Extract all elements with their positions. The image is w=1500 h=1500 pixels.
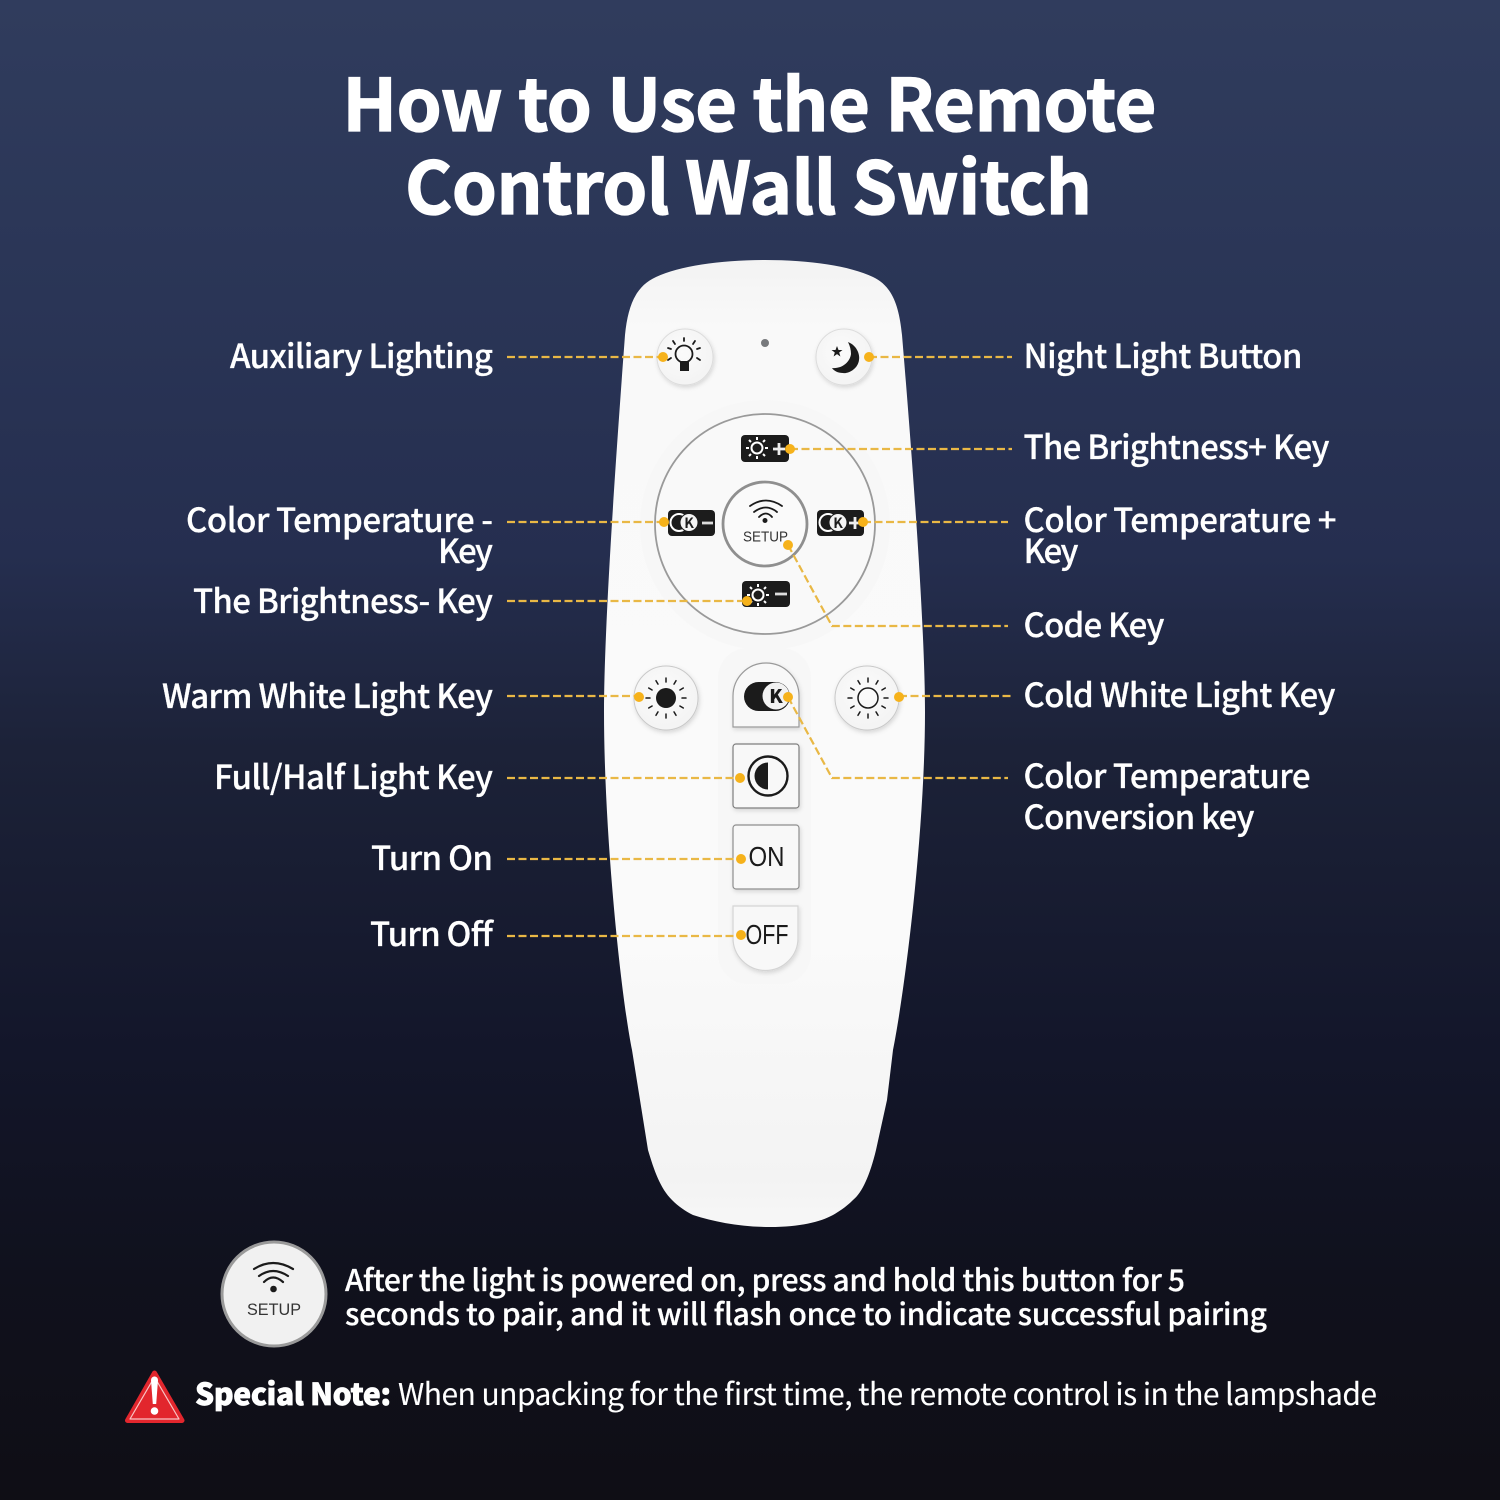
icon: full half light key [733,744,799,808]
icon: off key [733,906,798,970]
icon: setup key [743,500,788,546]
labels: right: Code Key [1024,599,1165,647]
icon: color temperature conversion key: K [769,682,783,709]
icon: auxiliary lighting button [657,329,713,385]
title: How to Use the Remote [342,47,1156,152]
icon: warning triangle [128,1373,182,1420]
labels: left: Auxiliary Lighting [230,330,493,378]
icon: warm white light key [634,666,698,730]
callout lines [507,352,1012,940]
panel: remote control body [604,260,925,1227]
labels: left [162,330,495,956]
labels: left: Full/Half Light Key [214,751,493,799]
icon: setup button large: SETUP [247,1300,301,1319]
icon: on key [733,825,799,889]
icon: cold white light key [835,666,899,730]
text: pairing instructions [345,1256,1267,1334]
text: special note: When unpacking for the first time, the remote control is in the lampshade [398,1370,1377,1414]
icon: brightness plus key [741,435,789,462]
labels: right: Night Light Button [1024,330,1302,378]
labels: left: The Brightness- Key [193,575,493,623]
title: Control Wall Switch [405,130,1092,235]
icon: color temperature plus key [817,510,864,536]
icon: off key: OFF [746,919,788,950]
icon: color temperature minus key [668,510,715,536]
text: pairing instructions: seconds to pair, and it will flash once to indicate successful pairing [345,1290,1267,1334]
icon: color temperature conversion key [733,663,799,727]
labels: right: Key [1024,525,1079,573]
panel: direction ring [655,414,875,634]
icon: color temperature minus key: K [684,513,694,533]
labels: right: Color Temperature + [1024,494,1336,542]
labels: left: Turn On [371,832,493,880]
icon: setup button large [222,1242,326,1346]
labels: left: Key [438,525,493,573]
text: pairing instructions: After the light is powered on, press and hold this button for 5 [345,1256,1185,1300]
labels: right: Color Temperature [1024,750,1310,798]
labels: right [1024,330,1336,839]
icon: setup key: SETUP [743,528,788,546]
icon: night light button [816,329,872,385]
labels: left: Turn Off [370,908,495,956]
title [342,47,1156,235]
labels: left: Color Temperature - [186,494,493,542]
labels: left: Warm White Light Key [162,670,493,718]
labels: right: Conversion key [1024,791,1255,839]
text: special note: Special Note: [195,1370,391,1414]
icon: color temperature plus key: K [833,513,843,533]
icon: brightness minus key [742,581,790,607]
icon: on key: ON [748,841,784,872]
labels: right: The Brightness+ Key [1024,421,1330,469]
labels: right: Cold White Light Key [1024,669,1336,717]
